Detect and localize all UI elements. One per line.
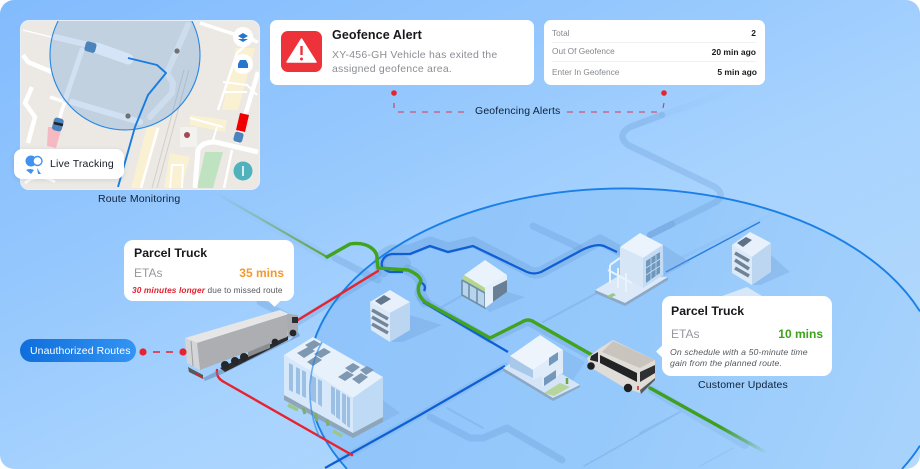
row: total — [552, 20, 756, 43]
panel: geofence stats — [544, 20, 765, 85]
icon: warning — [281, 31, 322, 72]
row: enter in geofence: Enter In Geofence — [552, 67, 619, 77]
text: alert message — [332, 49, 497, 75]
callout: parcel truck delayed — [124, 240, 294, 307]
parcel truck — [185, 310, 300, 381]
text: etas label: ETAs — [134, 266, 162, 280]
heading: geofence alert: Geofence Alert — [332, 28, 422, 42]
shop building — [462, 260, 525, 312]
heading: parcel truck: Parcel Truck — [671, 304, 744, 318]
map drawing — [21, 21, 259, 188]
heading: parcel truck: Parcel Truck — [134, 246, 207, 260]
pill: unauthorized routes — [20, 339, 136, 362]
row: out of geofence — [552, 43, 756, 62]
text: live tracking: Live Tracking — [50, 158, 114, 170]
blue geofence route — [325, 222, 760, 468]
text: alert message: XY-456-GH Vehicle has exited the — [332, 49, 497, 61]
green planned route — [214, 192, 767, 453]
caption: route monitoring: Route Monitoring — [98, 193, 180, 205]
house building — [503, 335, 585, 401]
geofence circle — [308, 188, 920, 469]
text: eta 10 mins: 10 mins — [778, 327, 823, 341]
row: out of geofence: Out Of Geofence — [552, 46, 615, 56]
right tower building — [722, 232, 790, 296]
panel: geofence alert — [270, 20, 534, 85]
callout pointer — [656, 345, 669, 358]
delivery van — [587, 340, 655, 394]
caption: customer updates: Customer Updates — [698, 379, 788, 391]
text: delay note: 30 minutes longer due to missed route — [132, 285, 283, 295]
text: eta 35 mins: 35 mins — [239, 266, 284, 280]
text: on schedule note: On schedule with a 50-minute time — [670, 347, 808, 357]
geofencing alerts connector — [391, 90, 667, 112]
text: alert message: assigned geofence area. — [332, 63, 452, 75]
caption: geofencing alerts: Geofencing Alerts — [475, 105, 560, 117]
small tower building — [370, 290, 442, 342]
pill: unauthorized routes: Unauthorized Routes — [30, 345, 131, 357]
icon: live tracking — [26, 156, 43, 174]
background roads — [214, 87, 797, 466]
panel: route monitoring map — [20, 20, 260, 190]
unauthorized route connector — [139, 348, 187, 356]
red unauthorized route — [217, 271, 378, 455]
row: total: Total — [552, 28, 570, 38]
office building with solar panels — [284, 337, 400, 438]
text: on schedule note — [670, 347, 808, 368]
label: live tracking — [14, 149, 124, 179]
callout pointer — [268, 294, 281, 307]
text: on schedule note: gain from the planned route. — [670, 358, 782, 368]
glass office on plaza — [595, 233, 690, 306]
text: etas label: ETAs — [671, 327, 699, 341]
row: enter in geofence: 5 min ago — [717, 67, 757, 77]
row: enter in geofence — [552, 67, 757, 77]
geofence line passing over building — [310, 342, 322, 438]
row: out of geofence: 20 min ago — [712, 47, 756, 57]
callout: parcel truck on schedule — [656, 296, 832, 376]
geofence circle outline — [308, 188, 920, 469]
row: total: 2 — [751, 28, 756, 38]
